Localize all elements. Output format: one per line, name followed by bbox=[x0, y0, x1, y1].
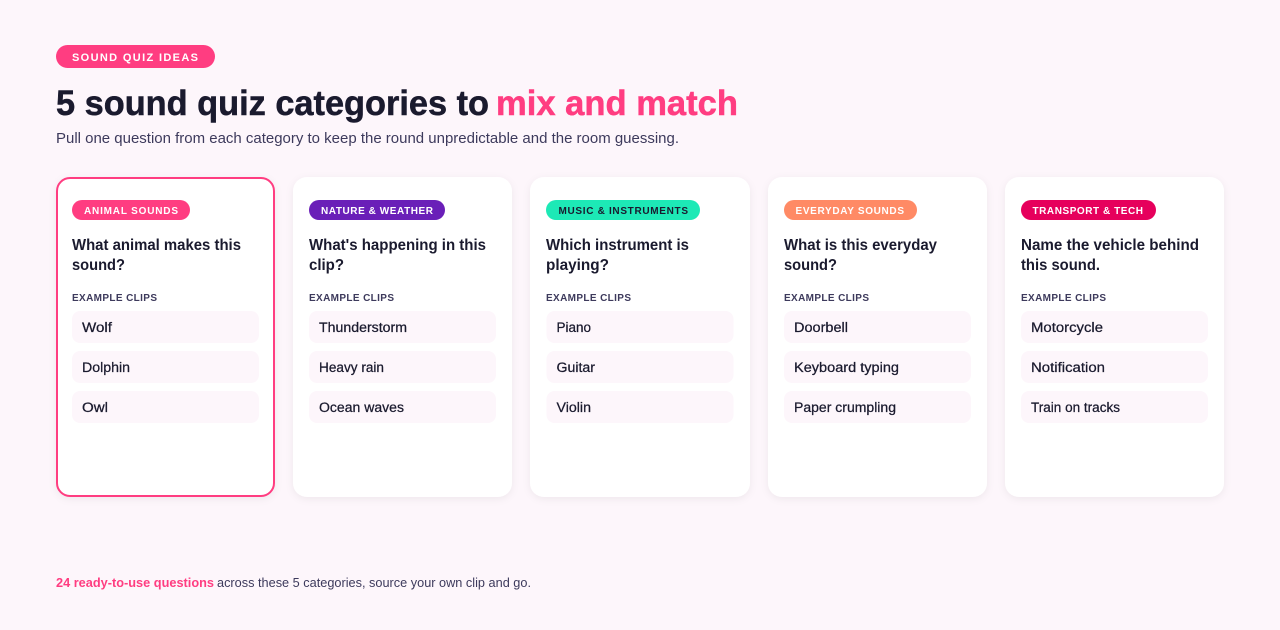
clip: Train on tracks: Train on tracks bbox=[1031, 400, 1120, 415]
question: Which instrument is bbox=[546, 237, 689, 254]
panel: everyday sounds bbox=[768, 177, 987, 497]
clip: Wolf bbox=[72, 311, 259, 343]
eyebrow badge: SOUND QUIZ IDEAS bbox=[72, 52, 198, 64]
clip: Notification bbox=[1021, 351, 1208, 383]
clip: Thunderstorm bbox=[309, 311, 496, 343]
clip: Heavy rain: Heavy rain bbox=[319, 360, 384, 375]
question: sound? bbox=[72, 257, 125, 274]
question: What animal makes this bbox=[72, 237, 241, 254]
clip: Violin: Violin bbox=[556, 400, 591, 415]
clip: Guitar bbox=[546, 351, 734, 383]
clip: Keyboard typing: Keyboard typing bbox=[794, 360, 899, 375]
question: What is this everyday bbox=[784, 237, 937, 254]
example clips label: EXAMPLE CLIPS bbox=[546, 293, 631, 304]
clip: Doorbell bbox=[784, 311, 971, 343]
question: sound? bbox=[784, 257, 837, 274]
clip: Notification: Notification bbox=[1031, 360, 1105, 375]
clip: Thunderstorm: Thunderstorm bbox=[319, 320, 407, 335]
question bbox=[1021, 237, 1199, 274]
clip: Piano bbox=[546, 311, 734, 343]
question: clip? bbox=[309, 257, 344, 274]
category pill: transport and tech: TRANSPORT & TECH bbox=[1032, 206, 1143, 217]
eyebrow badge bbox=[56, 45, 215, 68]
panel: nature and weather bbox=[293, 177, 512, 497]
panel: transport and tech bbox=[1005, 177, 1224, 497]
clip: Guitar: Guitar bbox=[556, 360, 596, 375]
example clips label: EXAMPLE CLIPS bbox=[72, 293, 157, 304]
clip: Train on tracks bbox=[1021, 391, 1208, 423]
clip: Paper crumpling: Paper crumpling bbox=[794, 400, 896, 415]
clip: Violin bbox=[546, 391, 734, 423]
panel: animal sounds bbox=[57, 178, 274, 496]
clip: Ocean waves: Ocean waves bbox=[319, 400, 404, 415]
question bbox=[784, 237, 937, 274]
category pill: animal sounds bbox=[72, 200, 190, 220]
question: Name the vehicle behind bbox=[1021, 237, 1199, 254]
clip: Dolphin bbox=[72, 351, 259, 383]
panel: music and instruments bbox=[530, 177, 750, 497]
category pill: transport and tech bbox=[1021, 200, 1156, 220]
clip: Keyboard typing bbox=[784, 351, 971, 383]
title bbox=[56, 84, 738, 123]
example clips label: EXAMPLE CLIPS bbox=[309, 293, 394, 304]
question: this sound. bbox=[1021, 257, 1100, 274]
clip: Owl: Owl bbox=[82, 400, 108, 415]
footer note bbox=[56, 576, 531, 590]
subtitle: Pull one question from each category to keep the round unpredictable and the room guessing. bbox=[56, 130, 679, 147]
clip: Wolf: Wolf bbox=[82, 320, 112, 335]
title: 5 sound quiz categories to bbox=[56, 84, 489, 123]
question: playing? bbox=[546, 257, 609, 274]
question: What's happening in this bbox=[309, 237, 486, 254]
category pill: nature and weather: NATURE & WEATHER bbox=[321, 206, 434, 217]
category pill: everyday sounds bbox=[784, 200, 917, 220]
clip: Doorbell: Doorbell bbox=[794, 320, 848, 335]
title: mix and match bbox=[496, 84, 738, 123]
example clips label: EXAMPLE CLIPS bbox=[1021, 293, 1106, 304]
category pill: everyday sounds: EVERYDAY SOUNDS bbox=[796, 206, 904, 217]
clip: Ocean waves bbox=[309, 391, 496, 423]
category pill: animal sounds: ANIMAL SOUNDS bbox=[84, 206, 178, 217]
clip: Owl bbox=[72, 391, 259, 423]
category pill: nature and weather bbox=[309, 200, 445, 220]
question bbox=[72, 237, 241, 274]
clip: Piano: Piano bbox=[556, 320, 591, 335]
question bbox=[546, 237, 689, 274]
clip: Motorcycle: Motorcycle bbox=[1031, 320, 1103, 335]
clip: Heavy rain bbox=[309, 351, 496, 383]
question bbox=[309, 237, 486, 274]
clip: Motorcycle bbox=[1021, 311, 1208, 343]
footer note: 24 ready-to-use questions bbox=[56, 576, 214, 590]
category pill: music and instruments bbox=[546, 200, 700, 220]
example clips label: EXAMPLE CLIPS bbox=[784, 293, 869, 304]
clip: Dolphin: Dolphin bbox=[82, 360, 130, 375]
clip: Paper crumpling bbox=[784, 391, 971, 423]
category pill: music and instruments: MUSIC & INSTRUMENTS bbox=[558, 206, 688, 217]
footer note: across these 5 categories, source your own clip and go. bbox=[217, 576, 531, 590]
